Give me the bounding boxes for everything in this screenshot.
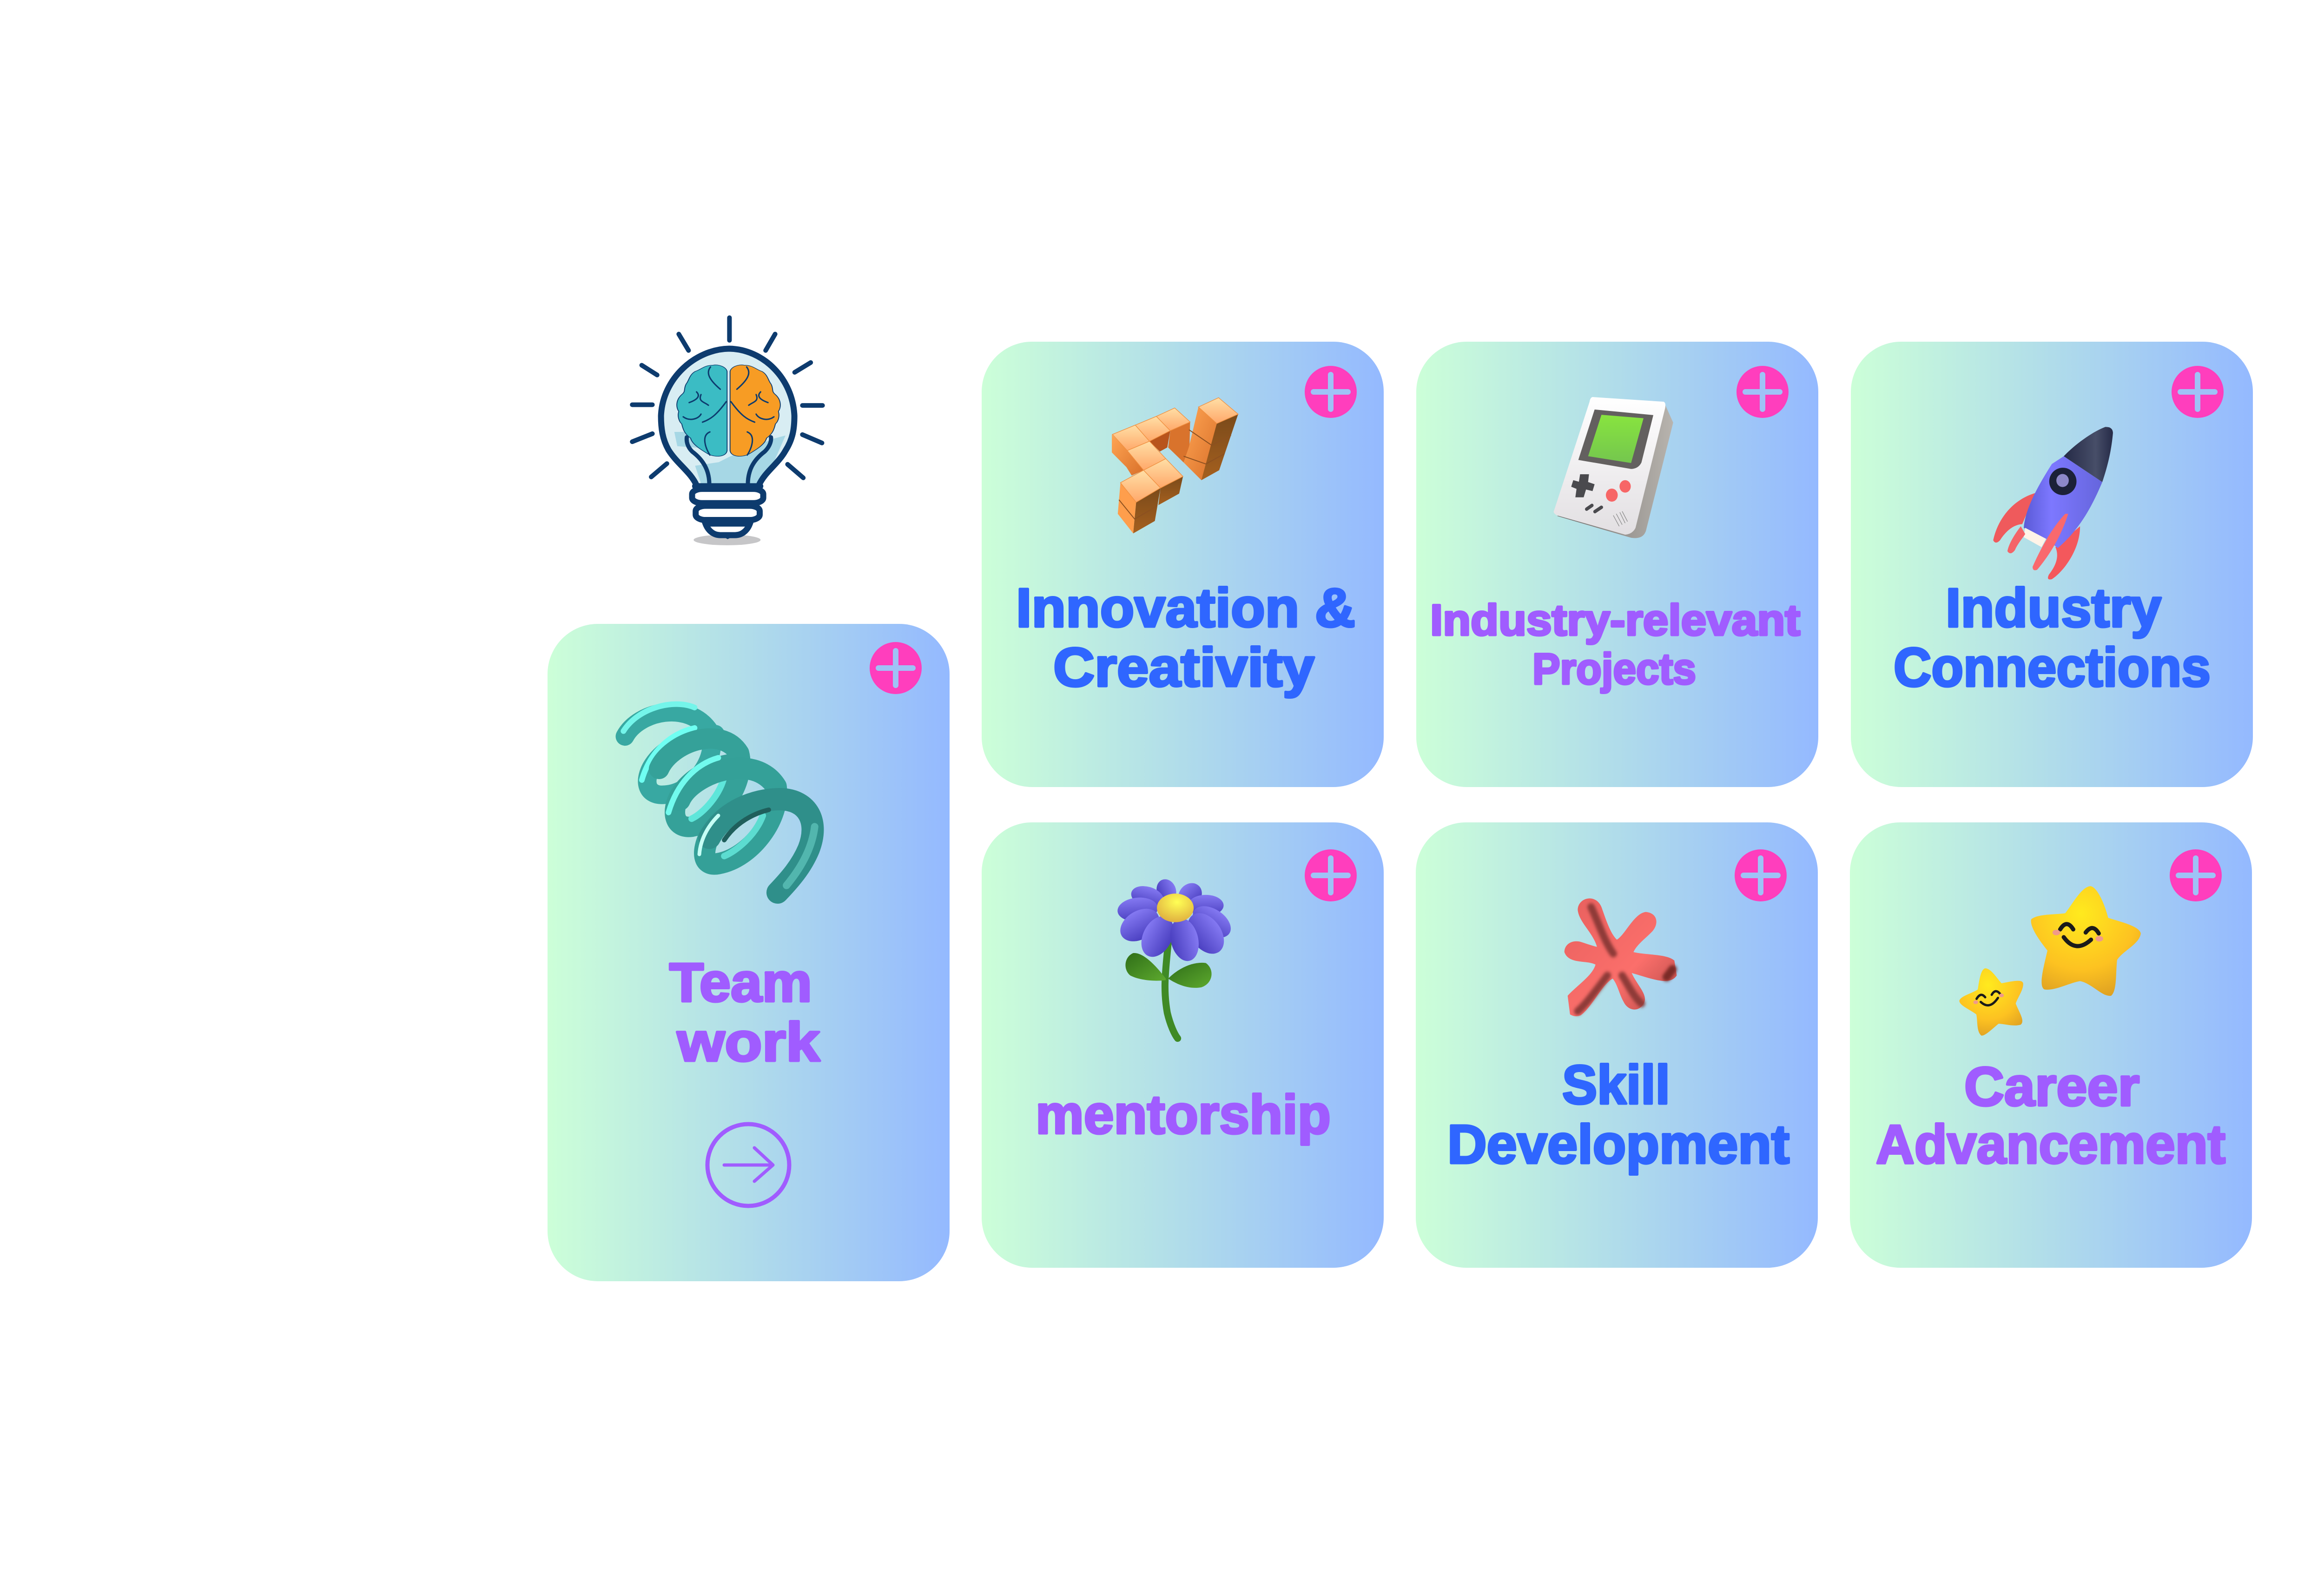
icon: smiling stars [1959, 886, 2141, 1036]
plus button [1305, 849, 1357, 901]
panel: Career Advancement [1850, 822, 2252, 1268]
plus button [2172, 366, 2224, 418]
icon: light bulb with brain [632, 318, 823, 545]
label: Industry-relevant Projects: Industry-relevant [1430, 596, 1800, 644]
bulb glass [661, 349, 794, 485]
plus button [2170, 849, 2222, 901]
panel: Industry-relevant Projects [1416, 342, 1818, 787]
icon: rocket [1993, 427, 2113, 580]
label: Career Advancement: Advancement [1876, 1114, 2225, 1175]
plus button [870, 642, 922, 694]
label: Industry-relevant Projects [1430, 596, 1800, 693]
arrow in circle [707, 1124, 789, 1206]
brain: left hemisphere [677, 365, 727, 456]
bulb screw base [692, 486, 763, 539]
label: Skill Development [1447, 1054, 1789, 1175]
label: Innovation & Creativity: Innovation & [1016, 577, 1355, 639]
label: Industry Connections [1894, 577, 2211, 698]
panel: Team work [548, 624, 950, 1281]
label: Innovation & Creativity [1016, 577, 1355, 698]
label: Industry Connections: Connections [1894, 637, 2211, 698]
plus button [1735, 849, 1787, 901]
plus button [1305, 366, 1357, 418]
icon: orange blocks [1112, 397, 1238, 533]
label: Team work [669, 952, 820, 1073]
label: mentorship: mentorship [1036, 1084, 1331, 1145]
icon: teal spring [623, 704, 815, 893]
plus button [1736, 366, 1789, 418]
label: Skill Development: Skill [1562, 1054, 1670, 1116]
icon: handheld game console [1554, 397, 1673, 538]
bulb light rays [632, 318, 823, 478]
label: Team work: Team [669, 952, 812, 1013]
label: Team work: work [677, 1012, 820, 1073]
panel: Skill Development [1416, 822, 1818, 1268]
label: Industry Connections: Industry [1946, 577, 2161, 639]
icon: red asterisk shape [1565, 898, 1677, 1016]
icon: balloon flower [1115, 876, 1236, 1039]
label: Career Advancement: Career [1964, 1056, 2139, 1118]
label: Innovation & Creativity: Creativity [1053, 637, 1314, 698]
panel: Industry Connections [1851, 342, 2253, 787]
label: Industry-relevant Projects: Projects [1532, 644, 1696, 693]
panel: mentorship [982, 822, 1384, 1268]
label: Skill Development: Development [1447, 1114, 1789, 1175]
bulb shadow [693, 535, 760, 545]
panel: Innovation & Creativity [982, 342, 1384, 787]
label: Career Advancement [1876, 1056, 2225, 1175]
brain: right hemisphere [730, 365, 780, 456]
